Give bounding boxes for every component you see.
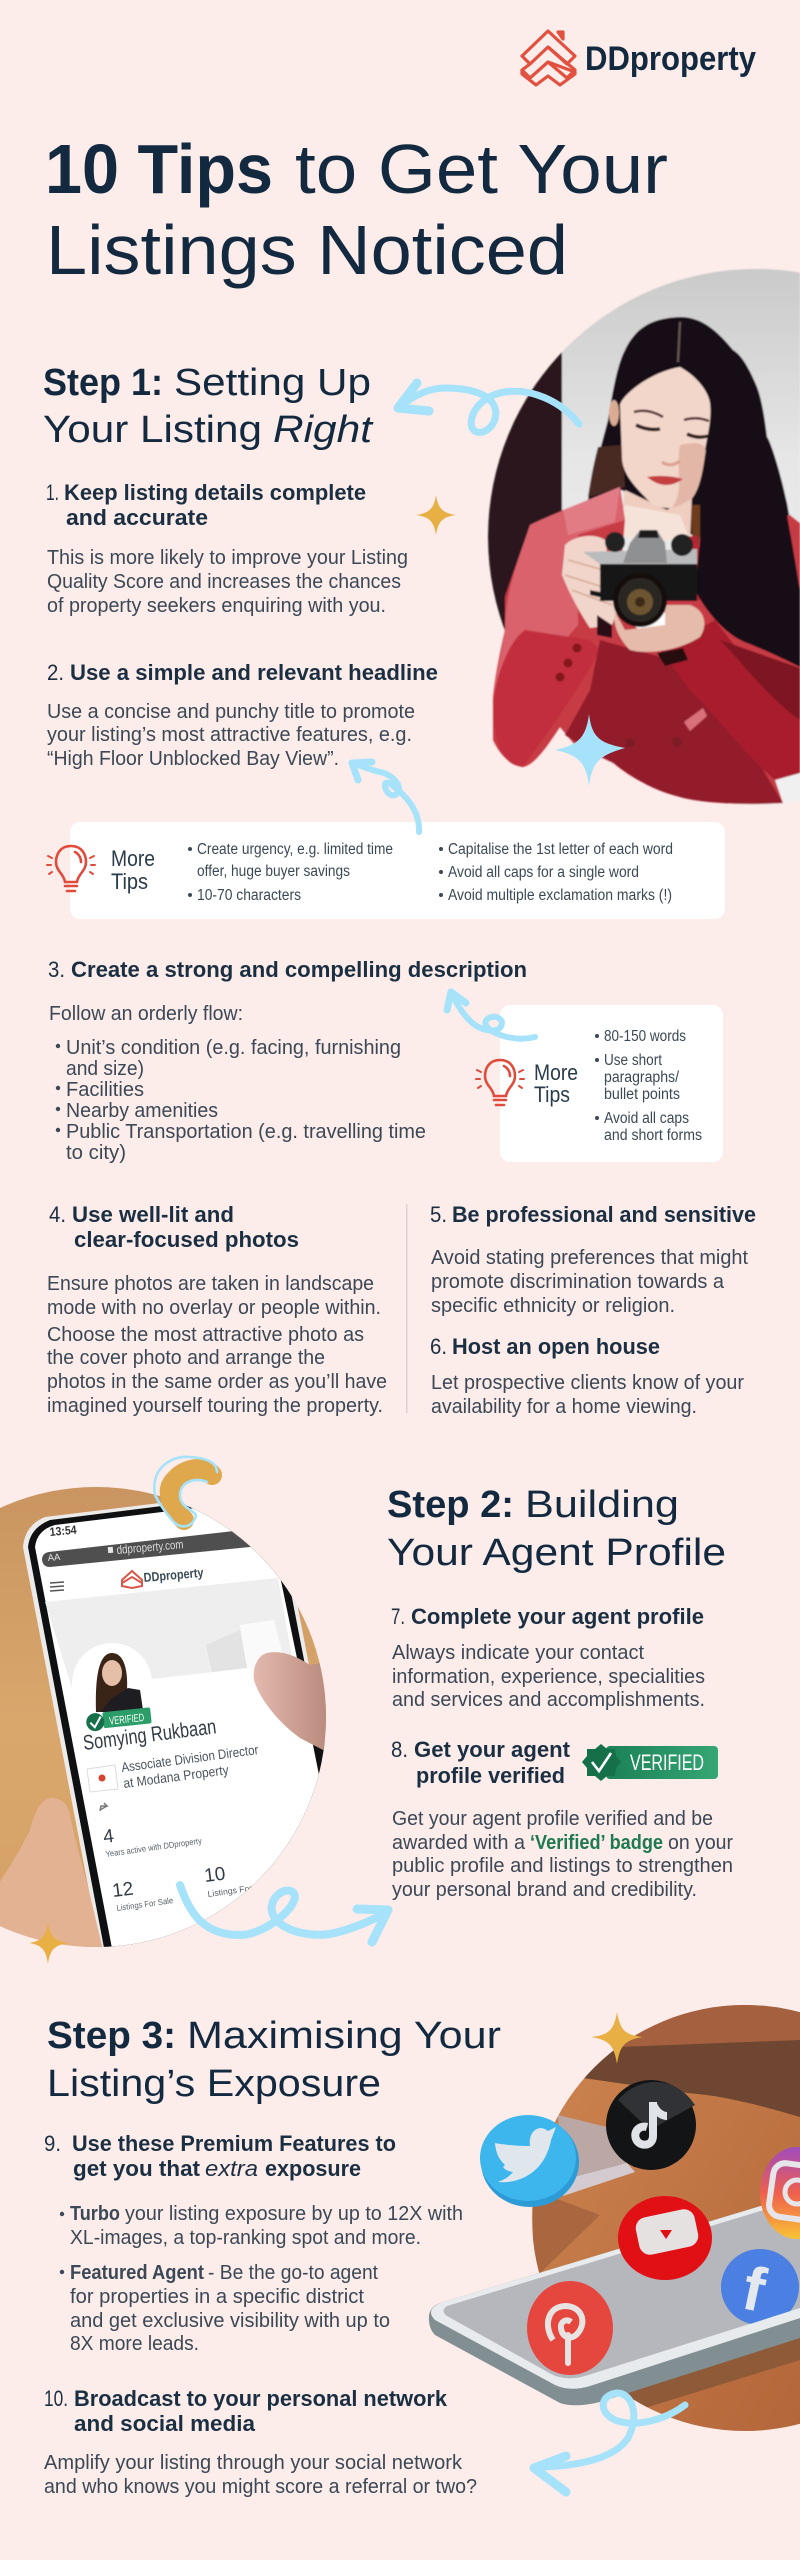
tip 8: your personal brand and credibility. xyxy=(392,1879,697,1901)
tip 7: Always indicate your contact xyxy=(392,1642,644,1664)
tip 8: profile verified xyxy=(416,1763,565,1788)
tip 6 xyxy=(430,1334,744,1418)
tip 4: the cover photo and arrange the xyxy=(47,1347,325,1369)
icon: instagram xyxy=(760,2147,800,2239)
panel: more tips for descriptions: 80-150 words xyxy=(604,1028,686,1045)
tip 5: promote discrimination towards a xyxy=(431,1271,725,1293)
tip 8: on your xyxy=(668,1832,733,1854)
tip 3: Unit’s condition (e.g. facing, furnishing xyxy=(66,1037,401,1059)
tip 5: 5. xyxy=(430,1202,447,1227)
tip 8 xyxy=(391,1737,733,1901)
icon: blue sparkle xyxy=(555,714,625,786)
icon: light bulb xyxy=(476,1060,524,1105)
heading: step 1: Step 1: xyxy=(43,362,163,404)
tip 4: 4. xyxy=(49,1202,66,1227)
icon: verified badge xyxy=(582,1744,718,1781)
panel: more tips for descriptions: and short forms xyxy=(604,1127,702,1144)
icon: gold sparkle xyxy=(29,1922,69,1964)
tip 2: Use a concise and punchy title to promote xyxy=(47,701,415,723)
icon: verified badge: VERIFIED xyxy=(630,1750,704,1775)
panel: more tips for descriptions xyxy=(476,1005,723,1162)
icon: gold sparkle xyxy=(416,495,456,535)
tip 5: Be professional and sensitive xyxy=(452,1202,756,1227)
tip 1: Keep listing details complete xyxy=(64,480,366,505)
icon: light bulb xyxy=(47,846,95,891)
title: 10 Tips xyxy=(45,130,273,208)
tip 10: Amplify your listing through your social network xyxy=(44,2452,463,2474)
tip 9: Use these Premium Features to xyxy=(72,2131,396,2156)
arrow: squiggle from phone to tip 8 xyxy=(180,1885,388,1942)
tip 10: and who knows you might score a referral or two? xyxy=(44,2476,477,2498)
decoration: tan curl with blue outline xyxy=(154,1457,217,1526)
tip 9: - Be the go-to agent xyxy=(208,2262,378,2284)
tip 9: for properties in a specific district xyxy=(70,2286,364,2308)
icon: house logo mark xyxy=(522,31,575,85)
icon: facebook: f xyxy=(737,2254,772,2326)
panel: more tips for headlines: Capitalise the 1st letter of each word xyxy=(448,841,673,858)
tip 3: to city) xyxy=(66,1142,126,1164)
tip 1: This is more likely to improve your Listing xyxy=(47,547,408,569)
tip 7: Complete your agent profile xyxy=(411,1604,704,1629)
photo: phone showing agent profile: VERIFIED xyxy=(109,1712,145,1728)
logo: DDproperty xyxy=(522,31,756,85)
photo: phone showing agent profile xyxy=(0,1487,326,1947)
arrow: squiggle to step 1 heading xyxy=(398,383,579,432)
tip 1: Quality Score and increases the chances xyxy=(47,571,401,593)
tip 3: 3. xyxy=(48,957,65,982)
tip 6: availability for a home viewing. xyxy=(431,1396,697,1418)
photo: phone showing agent profile: 10 xyxy=(203,1864,227,1887)
tip 2: your listing’s most attractive features, e.g. xyxy=(47,724,412,746)
tip 9: and get exclusive visibility with up to xyxy=(70,2310,390,2332)
tip 9: extra xyxy=(205,2156,258,2181)
icon: twitter xyxy=(480,2115,579,2207)
tip 1 xyxy=(46,480,408,617)
heading: step 1: Right xyxy=(273,409,374,451)
tip 10 xyxy=(44,2386,477,2498)
heading: step 2: Step 2: xyxy=(387,1484,514,1526)
tip 3: Nearby amenities xyxy=(66,1100,218,1122)
panel: more tips for descriptions: More xyxy=(534,1060,578,1085)
tip 8: Get your agent profile verified and be xyxy=(392,1808,713,1830)
photo: phone showing agent profile: Years active with DDproperty xyxy=(105,1835,203,1859)
tip 4: photos in the same order as you’ll have xyxy=(47,1371,387,1393)
photo: phone showing agent profile: Listings For xyxy=(207,1883,253,1899)
heading: step 3: Listing’s Exposure xyxy=(47,2063,381,2105)
tip 6: Host an open house xyxy=(452,1334,660,1359)
tip 1: of property seekers enquiring with you. xyxy=(47,595,386,617)
heading: step 1: Your Listing xyxy=(43,409,262,451)
title: Listings Noticed xyxy=(46,211,568,289)
tip 3 xyxy=(48,957,527,1164)
tip 6: Let prospective clients know of your xyxy=(431,1372,744,1394)
panel: more tips for descriptions: paragraphs/ xyxy=(604,1069,680,1086)
panel: more tips for headlines xyxy=(47,822,725,919)
panel: more tips for descriptions: Tips xyxy=(534,1082,570,1107)
tip 2: Use a simple and relevant headline xyxy=(70,660,438,685)
photo: woman holding a camera xyxy=(488,269,800,809)
heading: step 2: Building xyxy=(525,1484,679,1526)
heading: step 2: Your Agent Profile xyxy=(387,1532,726,1574)
tip 5 xyxy=(430,1202,756,1317)
tip 8: public profile and listings to strengthen xyxy=(392,1855,733,1877)
tip 4: mode with no overlay or people within. xyxy=(47,1297,381,1319)
heading: step 1 xyxy=(43,362,374,451)
tip 7: information, experience, specialities xyxy=(392,1666,705,1688)
icon: facebook xyxy=(721,2249,800,2342)
panel: more tips for headlines: Avoid multiple exclamation marks (!) xyxy=(448,887,672,904)
panel: more tips for headlines: Create urgency, e.g. limited time xyxy=(197,841,393,858)
heading: step 3 xyxy=(47,2015,501,2105)
logo: DDproperty: DDproperty xyxy=(585,40,756,78)
title xyxy=(45,130,668,289)
tip 10: Broadcast to your personal network xyxy=(74,2386,448,2411)
tip 4: clear-focused photos xyxy=(74,1227,299,1252)
tip 7: and services and accomplishments. xyxy=(392,1689,705,1711)
photo: social media icons on phone xyxy=(429,2000,800,2440)
icon: gold sparkle xyxy=(591,2012,643,2064)
tip 4: Choose the most attractive photo as xyxy=(47,1324,364,1346)
tip 8: Get your agent xyxy=(414,1737,571,1762)
photo: phone showing agent profile: 12 xyxy=(111,1879,135,1902)
photo: phone showing agent profile: AA xyxy=(47,1552,62,1564)
heading: step 3: Step 3: xyxy=(47,2015,176,2057)
tip 4: Use well-lit and xyxy=(72,1202,234,1227)
arrow: squiggle from tips box to tip 3 xyxy=(447,992,535,1039)
tip 9: exposure xyxy=(265,2156,361,2181)
tip 4: imagined yourself touring the property. xyxy=(47,1395,383,1417)
panel: more tips for descriptions: Use short xyxy=(604,1052,663,1069)
tip 6: 6. xyxy=(430,1334,447,1359)
arrow: squiggle toward tip 10 xyxy=(534,2393,685,2492)
tip 2: “High Floor Unblocked Bay View”. xyxy=(47,748,339,770)
tip 3: and size) xyxy=(66,1058,144,1080)
tip 1: 1. xyxy=(46,480,59,505)
panel: more tips for descriptions: Avoid all caps xyxy=(604,1110,689,1127)
photo: phone showing agent profile: Somying Rukbaan xyxy=(82,1715,218,1755)
tip 8: awarded with a xyxy=(392,1832,526,1854)
icon: tiktok xyxy=(606,2080,696,2170)
tip 10: 10. xyxy=(44,2386,68,2411)
panel: more tips for headlines: 10-70 characters xyxy=(197,887,301,904)
panel: more tips for headlines: Tips xyxy=(111,869,148,894)
icon: youtube xyxy=(618,2196,712,2280)
photo: phone showing agent profile: at Modana Property xyxy=(122,1762,230,1791)
tip 2: 2. xyxy=(47,660,64,685)
tip 9: Featured Agent xyxy=(70,2262,204,2284)
tip 4: Ensure photos are taken in landscape xyxy=(47,1273,374,1295)
tip 7 xyxy=(391,1604,705,1711)
tip 5: specific ethnicity or religion. xyxy=(431,1295,675,1317)
tip 3: Public Transportation (e.g. travelling time xyxy=(66,1121,426,1143)
tip 2 xyxy=(47,660,438,770)
tip 7: 7. xyxy=(391,1604,405,1629)
photo: phone showing agent profile: 13:54 xyxy=(49,1523,77,1539)
tip 9: Turbo xyxy=(70,2203,120,2225)
icon: pinterest xyxy=(527,2281,613,2375)
tip 9: XL-images, a top-ranking spot and more. xyxy=(70,2227,421,2249)
arrow: squiggle from tips box to tip 2 xyxy=(352,762,419,832)
photo: phone showing agent profile: Listings For Sale xyxy=(116,1895,174,1913)
heading: step 2 xyxy=(387,1484,726,1574)
photo: phone showing agent profile: Associate Division Director xyxy=(120,1742,260,1775)
tip 3: Facilities xyxy=(66,1079,144,1101)
tip 9: 8X more leads. xyxy=(70,2333,199,2355)
panel: more tips for headlines: offer, huge buyer savings xyxy=(197,863,350,880)
photo: phone showing agent profile: 4 xyxy=(102,1826,116,1848)
tip 9 xyxy=(44,2131,463,2355)
title: to Get Your xyxy=(295,130,668,208)
tip 4 xyxy=(47,1202,387,1417)
heading: step 1: Setting Up xyxy=(174,362,371,404)
panel: more tips for headlines: Avoid all caps for a single word xyxy=(448,864,639,881)
tip 9: 9. xyxy=(44,2131,61,2156)
tip 9: get you that xyxy=(73,2156,201,2181)
panel: more tips for descriptions: bullet points xyxy=(604,1086,680,1103)
tip 10: and social media xyxy=(74,2411,256,2436)
tip 8: ‘Verified’ badge xyxy=(530,1832,663,1854)
tip 5: Avoid stating preferences that might xyxy=(431,1247,748,1269)
tip 9: your listing exposure by up to 12X with xyxy=(125,2203,463,2225)
tip 3: Create a strong and compelling description xyxy=(71,957,527,982)
heading: step 3: Maximising Your xyxy=(187,2015,501,2057)
photo: phone showing agent profile: DDproperty xyxy=(143,1565,205,1585)
photo: phone showing agent profile: ddproperty.com xyxy=(116,1537,184,1557)
tip 1: and accurate xyxy=(66,505,208,530)
tip 8: 8. xyxy=(391,1737,408,1762)
panel: more tips for headlines: More xyxy=(111,846,155,871)
tip 3: Follow an orderly flow: xyxy=(49,1003,243,1025)
